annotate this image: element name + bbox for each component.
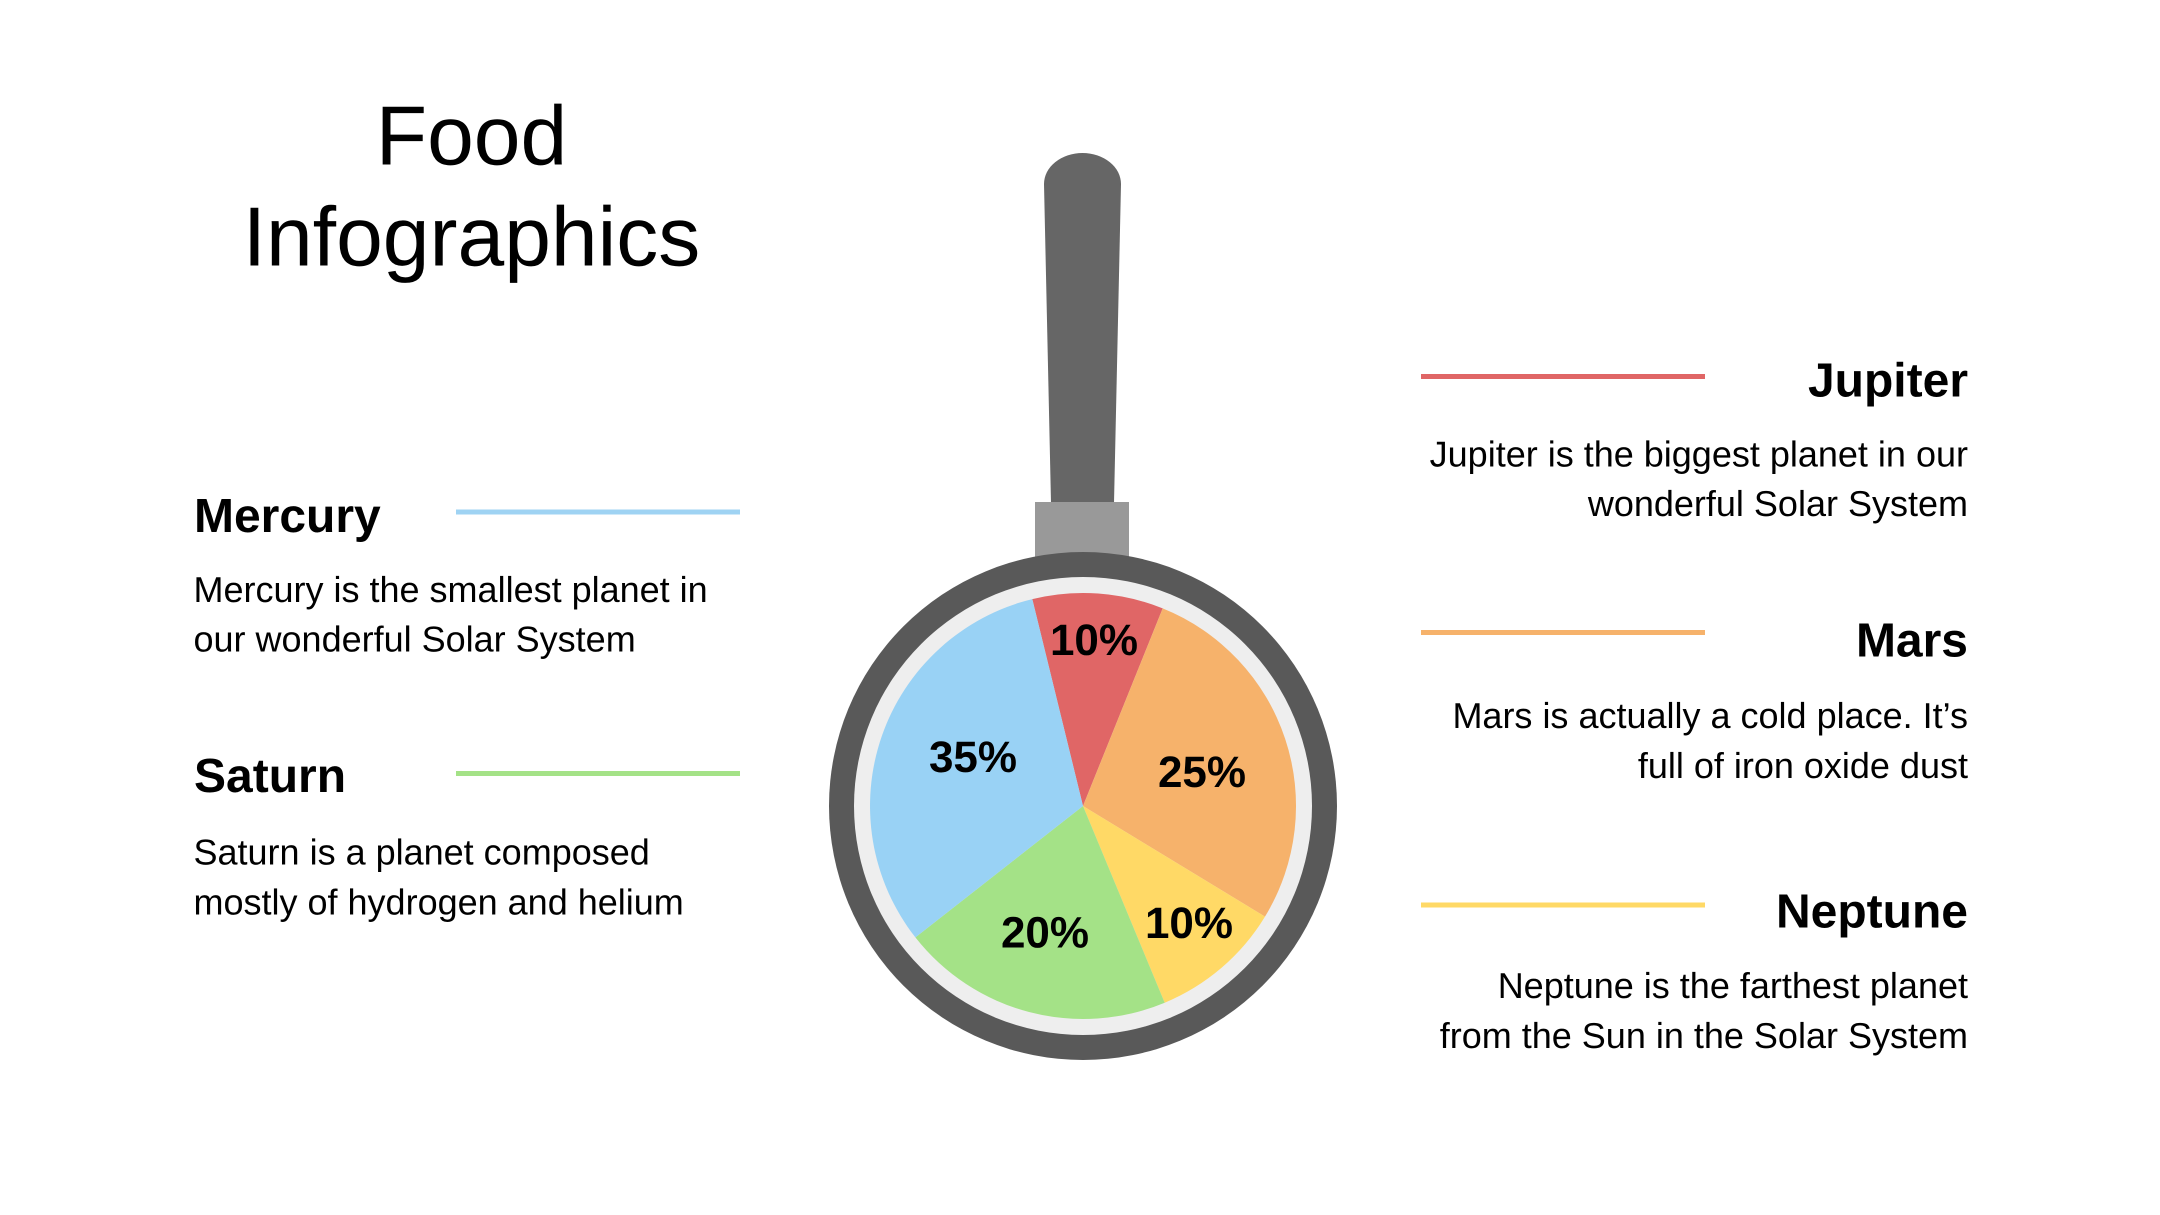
text: Jupiter description: wonderful Solar System <box>1587 483 1968 524</box>
pan handle <box>1044 153 1121 503</box>
label: 10% Jupiter: 10% <box>1050 616 1138 665</box>
text: Saturn description: Saturn is a planet composed <box>194 832 650 872</box>
connector line: Saturn <box>456 771 740 776</box>
title: Food <box>376 88 567 182</box>
text: Jupiter description <box>1430 434 1968 524</box>
panel: Mercury <box>194 490 740 660</box>
panel: Mars <box>1421 614 1968 786</box>
label: 25% Mars: 25% <box>1158 748 1246 797</box>
heading: Mercury: Mercury <box>194 490 381 543</box>
panel: Saturn <box>194 750 740 922</box>
text: Saturn description: mostly of hydrogen and helium <box>194 882 684 922</box>
panel: Neptune <box>1421 886 1968 1056</box>
slice: Mercury 35% <box>870 599 1083 937</box>
text: Mercury description: Mercury is the smallest planet in <box>194 569 708 610</box>
pan collar <box>1035 502 1129 562</box>
pan outer rim <box>829 552 1337 1060</box>
connector line: Neptune <box>1421 902 1705 908</box>
label: 20% Saturn: 20% <box>1001 908 1089 958</box>
title <box>243 88 700 284</box>
text: Mercury description: our wonderful Solar System <box>194 618 636 660</box>
slice: Neptune 10% <box>1083 806 1265 1003</box>
text: Neptune description <box>1440 965 1968 1056</box>
pan inner surface <box>854 577 1312 1035</box>
heading: Saturn: Saturn <box>194 750 346 803</box>
text: Neptune description: from the Sun in the Solar System <box>1440 1015 1968 1056</box>
connector line: Jupiter <box>1421 374 1705 379</box>
heading: Jupiter: Jupiter <box>1808 354 1968 408</box>
text: Mars description: full of iron oxide dust <box>1638 745 1968 786</box>
text: Mars description <box>1452 695 1968 786</box>
label: 10% Neptune: 10% <box>1145 899 1233 948</box>
connector line: Mercury <box>456 510 740 514</box>
label: 35% Mercury: 35% <box>929 733 1017 782</box>
text: Jupiter description: Jupiter is the biggest planet in our <box>1430 434 1968 474</box>
icon: frying pan with pie chart <box>829 153 1337 1060</box>
text: Neptune description: Neptune is the farthest planet <box>1498 965 1968 1006</box>
slice: Jupiter 10% <box>1032 593 1163 806</box>
heading: Neptune: Neptune <box>1776 886 1968 938</box>
text: Mars description: Mars is actually a cold place. It’s <box>1452 695 1968 736</box>
slice: Mars 25% <box>1083 608 1296 917</box>
slice: Saturn 20% <box>915 806 1165 1019</box>
text: Mercury description <box>194 569 708 660</box>
connector line: Mars <box>1421 630 1705 635</box>
title: Infographics <box>243 190 700 284</box>
pie chart <box>870 593 1296 1019</box>
panel: Jupiter <box>1421 354 1968 524</box>
text: Saturn description <box>194 832 684 922</box>
heading: Mars: Mars <box>1856 614 1968 668</box>
